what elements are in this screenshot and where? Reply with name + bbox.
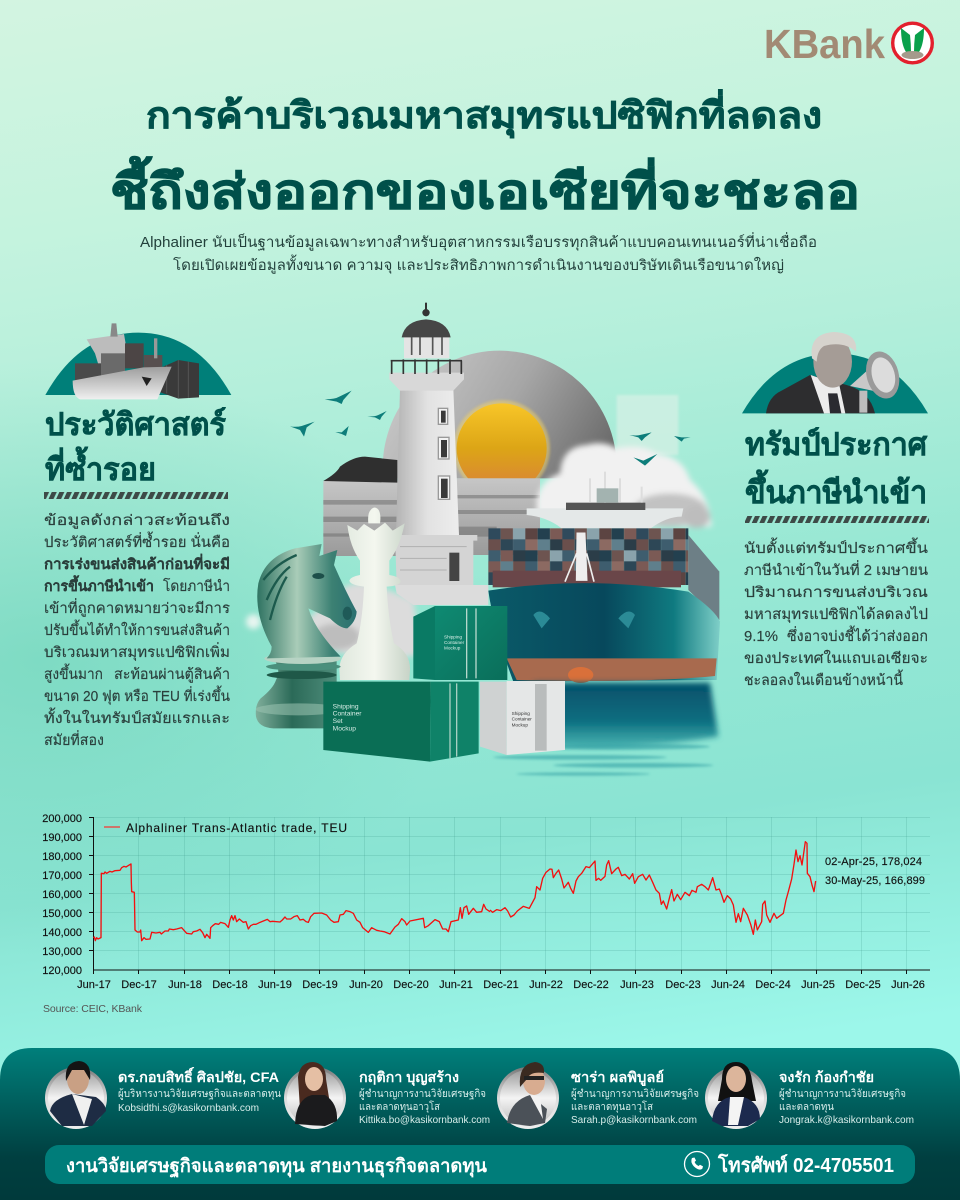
phone number: โทรศัพท์ 02-4705501 bbox=[717, 1153, 894, 1177]
icon: phone bbox=[684, 1152, 710, 1176]
title line 1: การค้าบริเวณมหาสมุทรแปซิฟิกที่ลดลง bbox=[146, 89, 822, 139]
person 3: ซาร่า ผลพิบูลย์ bbox=[571, 1069, 664, 1086]
person 4: และตลาดทุน bbox=[779, 1101, 834, 1113]
x axis labels: Jun-26 bbox=[891, 979, 925, 991]
panel: Trump tariff (right) bbox=[742, 332, 929, 689]
x axis labels: Dec-23 bbox=[665, 979, 701, 991]
text: Trump paragraph bbox=[744, 537, 928, 689]
text: Trump paragraph: ปริมาณการขนส่งบริเวณ bbox=[744, 585, 928, 601]
y axis labels: 130,000 bbox=[42, 946, 82, 958]
x axis labels: Jun-19 bbox=[258, 979, 292, 991]
department name: งานวิจัยเศรษฐกิจและตลาดทุน สายงานธุรกิจตลาดทุน bbox=[66, 1156, 487, 1179]
intro text: โดยเปิดเผยข้อมูลทั้งขนาด ความจุ และประสิทธิภาพการดำเนินงานของบริษัทเดินเรือขนาดใหญ่ bbox=[173, 254, 784, 274]
x axis labels: Dec-21 bbox=[483, 979, 519, 991]
text: history paragraph: ประวัติศาสตร์ที่ซ้ำรอย นั่นคือ bbox=[44, 531, 230, 551]
x axis labels: Jun-17 bbox=[77, 979, 111, 991]
central illustration: lighthouse, sun, chess pieces, containers, ship bbox=[246, 303, 720, 776]
x axis labels: Dec-22 bbox=[573, 979, 609, 991]
text: history paragraph: ข้อมูลดังกล่าวสะท้อนถึง bbox=[44, 512, 230, 529]
portrait 1 bbox=[45, 1061, 107, 1129]
x axis labels: Jun-24 bbox=[711, 979, 745, 991]
portrait 4 bbox=[705, 1062, 767, 1129]
shipping containers: Container bbox=[512, 717, 532, 722]
text: history paragraph: ทั้งในในทรัมป์สมัยแรกและ bbox=[44, 707, 230, 727]
y axis labels: 170,000 bbox=[42, 870, 82, 882]
x axis labels: Jun-18 bbox=[168, 979, 202, 991]
person 4: Jongrak.k@kasikornbank.com bbox=[779, 1114, 914, 1126]
panel: footer bbox=[0, 1048, 960, 1200]
text: history paragraph: ปรับขึ้นได้ทำให้การขนส่งสินค้า bbox=[44, 619, 230, 639]
text: history paragraph: สะท้อนผ่านตู้สินค้า bbox=[114, 666, 230, 683]
text: Trump paragraph: 9.1% bbox=[744, 629, 778, 645]
y axis labels: 160,000 bbox=[42, 889, 82, 901]
chess knight bbox=[256, 544, 357, 728]
x axis labels: Dec-18 bbox=[212, 979, 248, 991]
shipping containers: Mockup bbox=[512, 722, 528, 727]
person 4 bbox=[779, 1069, 914, 1126]
person 3: Sarah.p@kasikornbank.com bbox=[571, 1114, 697, 1126]
person 2 bbox=[359, 1069, 490, 1126]
text: Trump paragraph: ซึ่งอาจบ่งชี้ได้ว่าส่งออก bbox=[787, 625, 928, 645]
chart: Alphaliner TEU line chart bbox=[42, 813, 930, 991]
chart axes bbox=[89, 817, 930, 974]
ship bbox=[488, 472, 720, 683]
text: Trump paragraph: ชะลอลงในเดือนข้างหน้านี้ bbox=[744, 669, 903, 689]
shipping containers: Mockup bbox=[444, 646, 461, 651]
text: history paragraph: ขนาด 20 ฟุต หรือ TEU ที่เร่งขึ้น bbox=[44, 685, 230, 705]
person 3: และตลาดทุนอาวุโส bbox=[571, 1100, 654, 1113]
x axis labels: Dec-25 bbox=[845, 979, 881, 991]
person 1: ผู้บริหารงานวิจัยเศรษฐกิจและตลาดทุน bbox=[118, 1088, 281, 1100]
x axis labels: Jun-21 bbox=[439, 979, 473, 991]
text: history paragraph: การเร่งขนส่งสินค้าก่อนที่จะมี bbox=[44, 553, 230, 573]
person 2: กฤติกา บุญสร้าง bbox=[359, 1069, 459, 1086]
person 1: ดร.กอบสิทธิ์ ศิลปชัย, CFA bbox=[118, 1066, 279, 1085]
heading: Trump: ขึ้นภาษีนำเข้า bbox=[745, 469, 927, 510]
x axis labels: Dec-24 bbox=[755, 979, 791, 991]
x axis labels: Dec-19 bbox=[302, 979, 338, 991]
clouds bbox=[246, 395, 712, 663]
portrait 3 bbox=[497, 1062, 559, 1129]
icon: speaker with megaphone on teal dome bbox=[742, 332, 928, 413]
birds bbox=[290, 391, 691, 466]
shipping containers: Container bbox=[444, 640, 465, 645]
text: history paragraph: เข้าที่ถูกคาดหมายว่าจะมีการ bbox=[44, 598, 230, 617]
logo: KBank: KBank bbox=[764, 21, 885, 67]
text: Trump paragraph: มหาสมุทรแปซิฟิกได้ลดลงไป bbox=[744, 605, 928, 623]
text: Trump paragraph: ของประเทศในแถบเอเซียจะ bbox=[744, 649, 928, 667]
x axis labels: Jun-22 bbox=[529, 979, 563, 991]
x axis labels: Jun-25 bbox=[801, 979, 835, 991]
text: history paragraph: การขึ้นภาษีนำเข้า bbox=[44, 575, 154, 595]
person 2: และตลาดทุนอาวุโส bbox=[359, 1100, 441, 1113]
sea and hill bbox=[323, 457, 540, 556]
data line bbox=[93, 842, 816, 941]
person 1: Kobsidthi.s@kasikornbank.com bbox=[118, 1102, 259, 1114]
divider stripes right bbox=[745, 516, 929, 523]
portrait 2 bbox=[284, 1062, 346, 1129]
y axis labels: 120,000 bbox=[42, 965, 82, 977]
person 3: ผู้ชำนาญการงานวิจัยเศรษฐกิจ bbox=[571, 1088, 699, 1100]
heading: history: ที่ซ้ำรอย bbox=[45, 446, 156, 487]
person 4: จงรัก ก้องกำชัย bbox=[779, 1069, 874, 1085]
contact bar bbox=[45, 1145, 915, 1184]
y axis labels: 190,000 bbox=[42, 832, 82, 844]
heading: Trump bbox=[745, 427, 928, 510]
person 1 bbox=[118, 1066, 281, 1114]
lighthouse bbox=[389, 303, 488, 605]
y axis labels bbox=[42, 813, 82, 977]
shipping containers: Shipping bbox=[512, 711, 530, 716]
x axis labels: Dec-17 bbox=[121, 979, 157, 991]
person 2: ผู้ชำนาญการงานวิจัยเศรษฐกิจ bbox=[359, 1088, 486, 1100]
title line 2: ชี้ถึงส่งออกของเอเซียที่จะชะลอ bbox=[110, 156, 860, 219]
person 4: ผู้ชำนาญการงานวิจัยเศรษฐกิจ bbox=[779, 1088, 906, 1100]
panel: history repeats (left) bbox=[44, 323, 231, 749]
shipping containers: Set bbox=[333, 718, 343, 725]
chess queen bbox=[339, 507, 410, 680]
heading: history: ประวัติศาสตร์ bbox=[45, 407, 226, 442]
shipping containers bbox=[323, 606, 565, 762]
water reflection bbox=[493, 683, 718, 776]
person 3 bbox=[571, 1069, 699, 1126]
shipping containers: Shipping bbox=[444, 634, 463, 639]
x axis labels: Dec-20 bbox=[393, 979, 429, 991]
annotations: 02-Apr-25, 178,024 bbox=[825, 856, 922, 868]
y axis labels: 180,000 bbox=[42, 851, 82, 863]
x axis labels bbox=[77, 979, 925, 991]
y axis labels: 150,000 bbox=[42, 908, 82, 920]
text: history paragraph: โดยภาษีนำ bbox=[163, 577, 230, 595]
y axis labels: 200,000 bbox=[42, 813, 82, 825]
text: history paragraph: สูงขึ้นมาก bbox=[44, 663, 103, 683]
intro text bbox=[140, 232, 817, 274]
intro text: Alphaliner นับเป็นฐานข้อมูลเฉพาะทางสำหรับอุตสาหกรรมเรือบรรทุกสินค้าแบบคอนเทนเนอร์ที่น่าเชื่อถือ bbox=[140, 232, 817, 251]
annotations: 30-May-25, 166,899 bbox=[825, 875, 925, 887]
text: Trump paragraph: ภาษีนำเข้าในวันที่ 2 เมษายน bbox=[744, 560, 928, 579]
x axis labels: Jun-20 bbox=[349, 979, 383, 991]
icon: cargo ship on teal dome bbox=[45, 323, 231, 399]
y axis labels: 140,000 bbox=[42, 927, 82, 939]
text: history paragraph bbox=[44, 512, 230, 749]
shipping containers: Shipping bbox=[333, 703, 359, 710]
x axis labels: Jun-23 bbox=[620, 979, 654, 991]
grey disc and sun bbox=[383, 350, 616, 478]
text: history paragraph: สมัยที่สอง bbox=[44, 730, 104, 749]
divider stripes left bbox=[44, 492, 228, 499]
heading: Trump: ทรัมป์ประกาศ bbox=[745, 427, 928, 462]
person 2: Kittika.bo@kasikornbank.com bbox=[359, 1114, 490, 1126]
shipping containers: Mockup bbox=[333, 725, 356, 732]
text: Trump paragraph: นับตั้งแต่ทรัมป์ประกาศขึ้น bbox=[744, 537, 928, 557]
shipping containers: Container bbox=[333, 711, 362, 718]
chart source: Source: CEIC, KBank bbox=[43, 1003, 143, 1015]
annotations bbox=[825, 856, 925, 887]
heading: history bbox=[45, 407, 226, 487]
chart legend: Alphaliner Trans-Atlantic trade, TEU bbox=[126, 821, 347, 835]
text: history paragraph: บริเวณมหาสมุทรแปซิฟิกเพิ่ม bbox=[44, 642, 230, 661]
